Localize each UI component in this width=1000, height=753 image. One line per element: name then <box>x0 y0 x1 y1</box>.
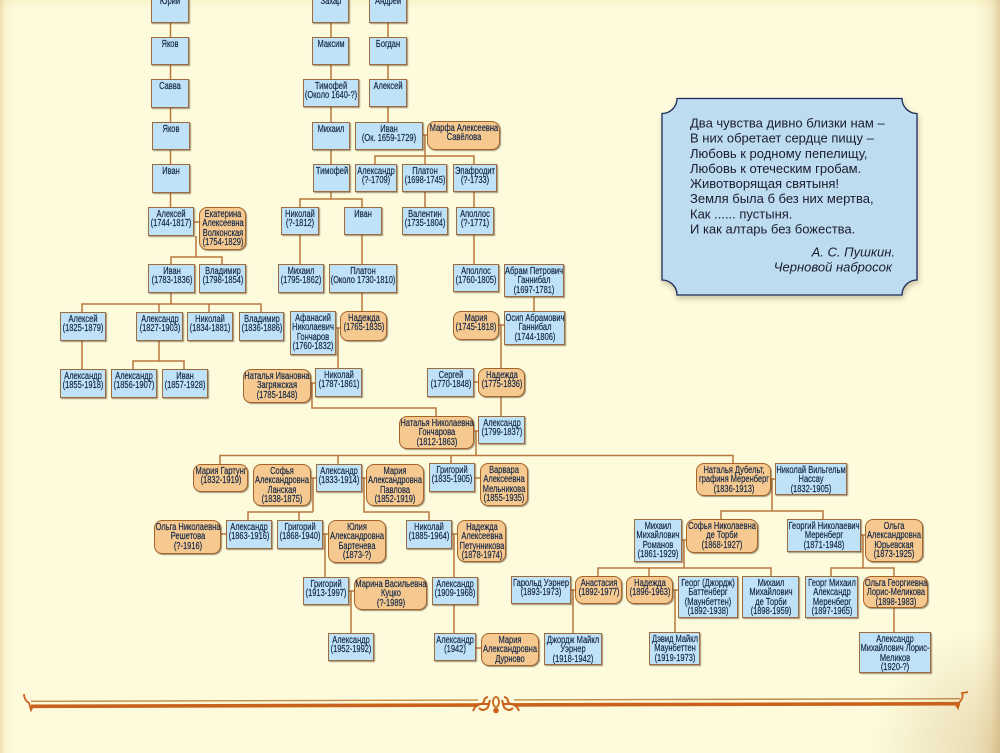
spouse: Юлия Бартенева: Юлия <box>347 522 367 533</box>
spouse: Варвара Мельникова: (1855-1935) <box>484 493 524 504</box>
spouse: Николай Вильгельм Нассау <box>775 463 847 495</box>
spouse: Георг Баттенберг <box>678 576 738 618</box>
spouse: Мария Павлова: Александровна <box>368 475 422 486</box>
person: Эпафродит <box>453 164 497 192</box>
person: Максим: Максим <box>317 39 344 50</box>
spouse: Мария Павлова: Мария <box>384 466 406 477</box>
person: Иван <box>152 164 190 193</box>
person: Александр Лорис-Меликов: Александр <box>876 634 914 645</box>
person: Наталья Дубельт: (1836-1913) <box>713 484 754 495</box>
person: Михаил: Михаил <box>318 124 344 135</box>
spouse: Мария Павлова: Павлова <box>380 485 410 496</box>
spouse: Ольга Юрьевская <box>865 519 923 562</box>
person: Владимир 1798: (1798-1854) <box>202 275 243 286</box>
spouse: Ольга Юрьевская: Ольга <box>884 521 904 532</box>
person: Александр Пушкин 1799: (1799-1837) <box>481 427 522 438</box>
person: Николай 1787 <box>315 368 362 397</box>
spouse: Ольга Юрьевская: Юрьевская <box>874 540 914 551</box>
spouse: Софья Ланская: Александровна <box>255 475 309 486</box>
person: Яков: Яков <box>162 39 178 50</box>
spouse: Гарольд Уэрнер: (1893-1973) <box>521 587 561 598</box>
person: Григорий 1913 <box>303 577 349 605</box>
person: Осип Ганнибал: Ганнибал <box>518 322 551 333</box>
person: Георгий Меренберг: (1871-1948) <box>804 540 844 551</box>
person: Ольга Лорис-Меликова: Ольга Георгиевна <box>864 578 927 589</box>
person: Осип Ганнибал: (1744-1806) <box>514 332 555 343</box>
spouse: Георг Баттенберг: (Маунбеттен) <box>685 597 731 608</box>
panel background with notched corners <box>662 98 917 295</box>
person: Николай 1834: Николай <box>195 314 225 325</box>
person: Николай 1787: (1787-1861) <box>318 379 359 390</box>
person: Платон 1730: Платон <box>350 266 376 277</box>
spouse: Наталья Гончарова: Гончарова <box>418 427 455 438</box>
person: Анастасия <box>575 576 622 604</box>
spouse: Надежда Петунникова: (1878-1974) <box>461 550 502 561</box>
person: Александр Лорис-Меликов <box>859 632 931 673</box>
person: Эпафродит: (?-1733) <box>461 175 489 186</box>
spouse: Наталья Гончарова: Наталья Николаевна <box>400 418 473 429</box>
person: Георгий Меренберг: Георгий Николаевич <box>788 521 860 532</box>
person: Платон 1698: (1698-1745) <box>404 175 445 186</box>
person: Георг Михаил Меренберг: Александр <box>813 587 850 598</box>
spouse: Мария Дурново <box>481 633 539 666</box>
person: Григорий 1913: Григорий <box>310 579 342 590</box>
person: Михаил де Торби: (1898-1959) <box>750 606 791 617</box>
spouse: Екатерина Волконская: Алексеевна <box>202 218 243 229</box>
person: Александр 1952 <box>328 633 374 661</box>
person: Владимир 1798: Владимир <box>205 266 240 277</box>
spouse: Марфа Савёлова: Марфа Алексеевна <box>429 123 498 134</box>
spouse: Надежда 1775: (1775-1836) <box>481 379 522 390</box>
person: Михаил Романов <box>634 519 682 562</box>
person: Валентин <box>402 207 448 235</box>
person: Григорий 1835: (1835-1905) <box>432 474 472 485</box>
poem text: В них обретает сердце пищу – <box>690 130 875 146</box>
poem text: Два чувства дивно близки нам – <box>690 116 885 130</box>
person: Николай 1834 <box>187 312 233 341</box>
person: Яков: Яков <box>163 124 179 135</box>
person: Александр 1856 <box>111 369 157 398</box>
poem text: Как ...... пустыня. <box>690 206 792 221</box>
spouse: Марина Куцко <box>354 577 427 610</box>
person: Наталья Дубельт <box>696 463 771 496</box>
person: Сергей 1770 <box>427 368 474 397</box>
person: Алексей <box>369 79 407 107</box>
person: Георг Михаил Меренберг <box>805 576 858 618</box>
person: Николай 1885: (1885-1964) <box>409 531 449 542</box>
person: Джордж Майкл Уэрнер: Джордж Майкл <box>547 635 599 646</box>
spouse: Софья Ланская <box>253 464 311 506</box>
spouse: Надежда Петунникова: Петунникова <box>459 541 504 552</box>
person: Надежда 1896: (1896-1963) <box>629 587 670 598</box>
person: Андрей <box>369 0 407 23</box>
person: Иван: Иван <box>162 166 180 177</box>
spouse: Софья Ланская: Ланская <box>268 485 296 496</box>
person: Афанасий Гончаров <box>290 311 336 355</box>
person: Михаил де Торби: Михайлович <box>749 587 792 598</box>
person: Иван 1857: Иван <box>176 371 194 382</box>
person: Иван 1857: (1857-1928) <box>165 380 205 391</box>
person: Аполлос 1771 <box>456 207 494 235</box>
person: Дэвид Майкл Маунбеттен: (1919-1973) <box>654 653 695 664</box>
spouse: Гарольд Уэрнер <box>511 576 571 604</box>
person: Михаил де Торби: де Торби <box>755 597 786 608</box>
person: Михаил 1795: Михаил <box>288 266 314 277</box>
spouse: Ольга Юрьевская: Александровна <box>867 530 921 541</box>
person: Александр Пушкин 1799 <box>478 416 525 444</box>
person: Григорий 1835 <box>429 463 475 492</box>
spouse: Наталья Загряжская: (1785-1848) <box>257 390 297 401</box>
spouse: Мария 1745: (1745-1818) <box>456 322 496 333</box>
person: Георг Михаил Меренберг: (1897-1965) <box>811 606 852 617</box>
person: Александр 1863: (1863-1916) <box>229 531 269 542</box>
person: Иван 1783: (1783-1836) <box>151 275 192 286</box>
person: Александр 1827: (1827-1903) <box>139 323 180 334</box>
person: Николай <box>281 207 319 235</box>
person: Александр 1909: Александр <box>436 579 474 590</box>
person: Владимир 1798 <box>199 264 246 293</box>
person: Николай 1885: Николай <box>414 522 444 533</box>
spouse: Надежда Петунникова: Надежда <box>466 522 497 533</box>
person: Георг Михаил Меренберг: Меренберг <box>812 597 851 608</box>
person: Джордж Майкл Уэрнер: Уэрнер <box>560 644 586 655</box>
person: Александр 1709: (?-1709) <box>362 175 390 186</box>
poem text: Животворящая святыня! <box>690 176 839 191</box>
person: Михаил Романов: Михайлович <box>636 530 680 541</box>
poem attribution: А. С. Пушкин. <box>811 244 895 260</box>
person: Иван 1783 <box>148 264 195 293</box>
person: Алексей 1744: (1744-1817) <box>151 218 191 229</box>
person: Александр 1833: Александр <box>320 466 358 477</box>
person: Александр 1952: (1952-1992) <box>331 644 371 655</box>
person: Александр 1827: Александр <box>141 314 178 325</box>
spouse: Варвара Мельникова: Варвара <box>489 465 519 476</box>
person: Джордж Майкл Уэрнер <box>544 633 602 665</box>
person: Абрам Ганнибал: Ганнибал <box>518 275 550 286</box>
person: Александр 1709 <box>355 164 397 192</box>
person: Григорий 1835: Григорий <box>436 465 468 476</box>
person: Ольга Лорис-Меликова: Лорис-Меликова <box>866 587 925 598</box>
spouse: Варвара Мельникова: Мельникова <box>483 484 525 495</box>
person: Иван 1659: Иван <box>380 124 398 135</box>
person: Эпафродит: Эпафродит <box>455 166 495 177</box>
spouse: Марфа Савёлова <box>427 121 500 150</box>
spouse: Мария Дурново: Дурново <box>495 654 525 665</box>
person: Афанасий Гончаров: Николаевич <box>292 322 334 333</box>
spouse: Мария Дурново: Мария <box>499 635 521 646</box>
person: Осип Ганнибал <box>504 311 565 345</box>
person: Афанасий Гончаров: (1760-1832) <box>293 341 333 352</box>
spouse: Надежда Петунникова: Алексеевна <box>461 531 502 542</box>
spouse: Николай Вильгельм Нассау: Нассау <box>799 474 823 485</box>
person: Аполлос 1760: (1760-1805) <box>456 275 496 286</box>
person: Владимир 1836: Владимир <box>244 314 279 325</box>
person: Валентин: (1735-1804) <box>405 218 445 229</box>
person: Абрам Ганнибал <box>504 264 564 297</box>
person: Николай 1834: (1834-1881) <box>190 323 230 334</box>
spouse: Екатерина Волконская: (1754-1829) <box>202 237 243 248</box>
person: Тимофей 1640: (Около 1640-?) <box>305 90 357 101</box>
person: Алексей 1825: Алексей <box>68 314 98 325</box>
spouse: Варвара Мельникова: Алексеевна <box>483 474 525 485</box>
person: Алексей 1744 <box>148 207 194 236</box>
person: Александр 1833: (1833-1914) <box>319 475 359 486</box>
poem text: Любовь к родному пепелищу, <box>690 146 868 161</box>
person: Михаил Романов: (1861-1929) <box>638 549 678 560</box>
spouse: Екатерина Волконская <box>199 207 246 250</box>
person: Александр 1952: Александр <box>332 635 370 646</box>
person: Иван 1783: Иван <box>163 266 180 277</box>
person: Надежда 1896 <box>626 576 673 604</box>
spouse: Юлия Бартенева: Александровна <box>330 531 384 542</box>
person: Алексей 1825: (1825-1879) <box>63 323 103 334</box>
person: Анастасия: Анастасия <box>580 578 617 589</box>
spouse: Софья де Торби <box>686 519 758 553</box>
spouse: Наталья Загряжская: Наталья Ивановна <box>244 371 310 382</box>
person: Иван 1659: (Ок. 1659-1729) <box>362 133 416 144</box>
spouse: Наталья Загряжская: Загряжская <box>257 380 297 391</box>
person: Иван 1659 <box>355 122 423 150</box>
person: Тимофей 1640 <box>303 79 359 107</box>
spouse: Георг Баттенберг: Георг (Джордж) <box>681 578 735 589</box>
person: Ольга Лорис-Меликова <box>863 576 928 608</box>
spouse: Мария Дурново: Александровна <box>483 644 537 655</box>
spouse: Софья Ланская: Софья <box>270 466 294 477</box>
spouse: Ольга Решетова: (?-1916) <box>173 541 202 552</box>
spouse: Николай Вильгельм Нассау: (1832-1905) <box>791 484 831 495</box>
spouse: Екатерина Волконская: Екатерина <box>204 209 241 220</box>
person: Иван: Иван <box>354 209 372 220</box>
person: Михаил 1795: (1795-1862) <box>281 275 321 286</box>
person: Дэвид Майкл Маунбеттен: Маунбеттен <box>654 643 695 654</box>
poem text: Земля была б без них мертва, <box>690 191 874 206</box>
spouse: Софья Ланская: (1838-1875) <box>262 494 302 505</box>
person: Алексей 1825 <box>60 312 106 341</box>
person: Тимофей <box>313 164 350 192</box>
person: Михаил <box>312 122 350 150</box>
person: Дэвид Майкл Маунбеттен <box>649 632 700 665</box>
spouse: Юлия Бартенева: (1873-?) <box>343 550 371 561</box>
person: Георг Михаил Меренберг: Георг Михаил <box>808 578 855 589</box>
spouse: Надежда 1775: Надежда <box>486 370 517 381</box>
person: Александр Лорис-Меликов: (1920-?) <box>881 662 909 673</box>
spouse: Екатерина Волконская: Волконская <box>202 228 243 239</box>
poem text <box>690 116 885 236</box>
person: Афанасий Гончаров: Афанасий <box>295 313 331 324</box>
spouse: Марина Куцко: Марина Васильевна <box>355 579 426 590</box>
person: Юрий <box>151 0 189 23</box>
person: Михаил де Торби <box>742 576 799 618</box>
spouse: Гарольд Уэрнер: Гарольд Уэрнер <box>513 578 569 589</box>
spouse: Георг Баттенберг: (1892-1938) <box>688 606 728 617</box>
person: Александр 1709: Александр <box>357 166 395 177</box>
person: Михаил Романов: Михаил <box>645 521 671 532</box>
spouse: Юлия Бартенева <box>328 520 386 563</box>
person: Александр 1909: (1909-1968) <box>435 588 475 599</box>
person: Александр 1909 <box>432 577 478 605</box>
poem text: Любовь к отеческим гробам. <box>690 161 861 176</box>
person: Савва: Савва <box>159 81 181 92</box>
person: Тимофей: Тимофей <box>315 166 348 177</box>
person: Михаил 1795 <box>278 264 324 293</box>
person: Абрам Ганнибал: Абрам Петрович <box>505 266 563 277</box>
person: Сергей 1770: (1770-1848) <box>430 379 471 390</box>
poem attribution <box>774 244 895 274</box>
spouse: Надежда 1765: (1765-1835) <box>343 322 384 333</box>
person: Абрам Ганнибал: (1697-1781) <box>514 285 554 296</box>
person: Николай 1787: Николай <box>324 370 353 381</box>
person: Иван <box>344 207 382 235</box>
spouse: Ольга Решетова: Решетова <box>170 531 205 542</box>
person: Александр Лорис-Меликов: Михайлович Лорис- <box>861 643 929 654</box>
person: Владимир 1836: (1836-1886) <box>241 323 282 334</box>
person: Анастасия: (1892-1977) <box>578 587 619 598</box>
poem text: И как алтарь без божества. <box>690 222 855 236</box>
spouse: Наталья Гончарова: (1812-1863) <box>416 437 457 448</box>
person: Сергей 1770: Сергей <box>438 370 463 381</box>
spouse: Мария Павлова: (1852-1919) <box>375 494 415 505</box>
person: Александр 1856: (1856-1907) <box>114 380 154 391</box>
person: Савва <box>151 79 189 108</box>
spouse: Георг Баттенберг: Баттенберг <box>688 587 728 598</box>
person: Алексей 1744: Алексей <box>156 209 186 220</box>
spouse: Мария 1745 <box>453 311 499 340</box>
person: Александр Пушкин 1799: Александр <box>483 418 520 429</box>
person: Иван 1857 <box>162 369 208 398</box>
person: Григорий 1868 <box>277 520 323 549</box>
spouse: Ольга Юрьевская: (1873-1925) <box>874 549 914 560</box>
person: Григорий 1868: (1868-1940) <box>280 531 320 542</box>
spouse: Надежда 1765 <box>340 311 387 341</box>
spouse: Ольга Решетова: Ольга Николаевна <box>155 522 220 533</box>
person: Михаил де Торби: Михаил <box>757 578 784 589</box>
spouse: Надежда Петунникова <box>457 520 506 562</box>
person: Александр 1863: Александр <box>230 522 268 533</box>
person: Александр 1942: Александр <box>436 635 474 646</box>
spouse: Мария Гартунг <box>193 464 248 492</box>
person: Александр Лорис-Меликов: Меликов <box>880 653 910 664</box>
person: Александр 1863 <box>226 520 272 549</box>
person: Николай 1885 <box>406 520 452 549</box>
person: Платон 1730 <box>329 264 397 293</box>
person: Алексей: Алексей <box>373 81 403 92</box>
spouse: Марина Куцко: Куцко <box>381 588 400 599</box>
center flourish <box>473 697 519 713</box>
spouse: Мария Гартунг: (1832-1919) <box>200 475 241 486</box>
person: Наталья Дубельт: Наталья Дубельт, <box>703 465 764 476</box>
person: Александр 1833 <box>316 464 362 492</box>
person: Александр 1855: Александр <box>64 371 102 382</box>
person: Николай: (?-1812) <box>286 218 314 229</box>
person: Александр 1942: (1942) <box>444 644 466 655</box>
person: Надежда 1896: Надежда <box>634 578 665 589</box>
spouse: Ольга Решетова <box>154 520 221 554</box>
person: Платон 1698: Платон <box>412 166 437 177</box>
person: Аполлос 1771: (?-1771) <box>461 218 489 229</box>
spouse: Наталья Загряжская <box>243 369 311 403</box>
spouse: Марфа Савёлова: Савёлова <box>446 132 481 143</box>
person: Дэвид Майкл Маунбеттен: Дэвид Майкл <box>652 634 697 645</box>
person: Тимофей 1640: Тимофей <box>315 81 347 92</box>
poem attribution: Черновой набросок <box>774 260 893 274</box>
person: Александр 1855 <box>60 369 106 398</box>
person: Александр 1942 <box>434 633 476 661</box>
spouse: Софья де Торби: (1868-1927) <box>702 540 742 551</box>
person: Александр 1856: Александр <box>115 371 153 382</box>
spouse: Софья де Торби: де Торби <box>706 530 738 541</box>
spouse: Надежда 1775 <box>478 368 525 397</box>
person: Платон 1698 <box>402 164 447 192</box>
spouse: Надежда 1765: Надежда <box>348 313 379 324</box>
person: Богдан <box>369 37 407 65</box>
spouse: Марина Куцко: (?-1989) <box>376 598 405 609</box>
person: Афанасий Гончаров: Гончаров <box>297 332 329 343</box>
person: Владимир 1836 <box>239 312 284 341</box>
person: Максим <box>312 37 349 65</box>
person: Григорий 1913: (1913-1997) <box>306 588 346 599</box>
person: Захар <box>312 0 349 23</box>
spouse: Мария 1745: Мария <box>465 313 487 324</box>
person: Осип Ганнибал: Осип Абрамович <box>505 313 564 324</box>
spouse: Николай Вильгельм Нассау: Николай Вильгельм <box>776 465 846 476</box>
person: Александр 1827 <box>136 312 183 341</box>
person: Георгий Меренберг <box>787 519 861 552</box>
person: Яков <box>152 122 190 150</box>
person: Ольга Лорис-Меликова: (1898-1983) <box>875 597 916 608</box>
person: Аполлос 1760 <box>453 264 499 292</box>
person: Георгий Меренберг: Меренберг <box>805 530 843 541</box>
person: Наталья Дубельт: графиня Меренберг <box>698 474 769 485</box>
person: Аполлос 1760: Аполлос <box>461 266 491 277</box>
person: Джордж Майкл Уэрнер: (1918-1942) <box>553 654 593 665</box>
spouse: Юлия Бартенева: Бартенева <box>338 541 376 552</box>
person: Александр 1855: (1855-1918) <box>63 380 103 391</box>
spouse: Мария Гартунг: Мария Гартунг <box>195 466 246 477</box>
person: Николай: Николай <box>285 209 315 220</box>
spouse: Софья де Торби: Софья Николаевна <box>688 521 756 532</box>
person: Аполлос 1771: Аполлос <box>460 209 490 220</box>
spouse: Мария Павлова <box>366 464 424 506</box>
spouse: Наталья Гончарова <box>399 416 474 449</box>
person: Платон 1730: (Около 1730-1810) <box>331 275 395 286</box>
person: Валентин: Валентин <box>408 209 442 220</box>
person: Григорий 1868: Григорий <box>284 522 316 533</box>
person: Михаил Романов: Романов <box>643 540 673 551</box>
person: Богдан: Богдан <box>376 39 400 50</box>
person: Яков <box>151 37 189 65</box>
spouse: Варвара Мельникова <box>480 463 528 506</box>
